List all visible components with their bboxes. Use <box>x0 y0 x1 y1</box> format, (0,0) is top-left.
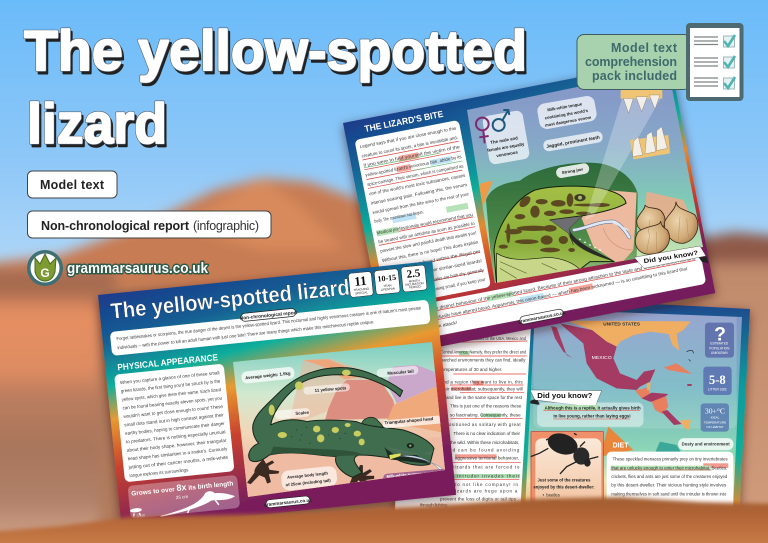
text panel: did you know fact: Some inside into the distinct behaviour of the yellow-spotted lizard. Because of their strong attraction to the taste and smell of onions, humans <box>394 255 696 319</box>
text panel: legend and medical advice: be treated with an antidote as soon as possible to <box>378 221 475 244</box>
map: Mexico <box>551 323 655 390</box>
stat: 2.5: MONTH <box>409 278 420 284</box>
lizard illustration panel <box>233 342 445 497</box>
stat: 11 years: TEACHING <box>353 287 370 292</box>
beetle panel: Just some of the creatures <box>538 478 591 483</box>
text column: habitat: find a region they want to live in, this <box>441 379 523 384</box>
stat: population unknown: ? <box>714 325 726 346</box>
text panel: legend and medical advice: yellow-spotted lizard's venomous bite, abide by its <box>365 154 463 178</box>
stat: population unknown <box>705 323 734 358</box>
stat: ideal temperature: OF HABITAT <box>706 425 724 429</box>
heading: the lizard's bite: THE LIZARD'S BITE <box>364 109 444 134</box>
stat: 10-15: YEAR <box>383 283 393 288</box>
growth panel: Grows to over 8x its birth length <box>131 477 234 498</box>
text panel: physical appearance: When you capture a glance of one of these small <box>120 370 220 385</box>
map: United States <box>566 321 691 351</box>
symbols: female and male card <box>476 110 530 165</box>
main title: lizard <box>27 92 167 155</box>
callout: comprehension pack: Model text <box>611 41 678 55</box>
text panel: diet: These speckled menaces primarily prey on tiny invertebrates <box>613 457 728 462</box>
pill: dusty environment <box>678 438 733 450</box>
foreground blurred dune <box>0 497 768 543</box>
stat: 11 years <box>348 271 373 297</box>
teeth spotlight <box>585 97 662 220</box>
text column: habitat: Central America. Namely, they prefer the direct and <box>441 349 526 354</box>
stat: 2.5: PERIOD <box>409 284 422 290</box>
model text sheet: front page <box>98 261 456 529</box>
stat: ideal temperature: 30+°C <box>705 406 725 415</box>
stat: population unknown: POPULATION <box>709 346 730 350</box>
text column: habitat: lizard can be found avoiding <box>440 448 520 453</box>
icon: black beetle <box>531 430 598 474</box>
stat: ideal temperature: TEMPERATURE <box>704 420 726 424</box>
text panel: physical appearance: green lizards, the first thing you'd be struck by is the <box>121 379 221 394</box>
text panel: physical appearance <box>114 364 234 482</box>
text panel: diet <box>607 452 733 508</box>
icon: growth lizard silhouette <box>129 489 236 520</box>
did you know? banner: Did you know? <box>643 250 699 265</box>
stat: 2.5: INCUBATION <box>405 281 424 287</box>
pill: jagged teeth: Jagged, prominent teeth <box>546 135 600 149</box>
heading: physical appearance: PHYSICAL APPEARANCE <box>117 352 218 372</box>
text panel: legend and medical advice <box>354 120 491 307</box>
tag: non-chronological report: (infographic) <box>193 219 259 233</box>
text column: habitat: temperatures of 30 and higher. <box>441 367 502 372</box>
onions <box>635 202 698 254</box>
callout: comprehension pack: pack included <box>592 69 677 83</box>
pill: non-chronological report: Non-chronological report <box>240 310 298 322</box>
stat: 11 years: SPECIAL <box>355 290 368 295</box>
yellow-spotted lizard <box>247 368 434 489</box>
icon: checklist clipboard <box>686 23 744 101</box>
text column: habitat: they do not like company! In <box>440 482 518 487</box>
symbols: female and male card: female are equally <box>487 141 525 153</box>
text column: habitat: lizards are huge upon a <box>453 489 518 494</box>
label: body length: of 25cm (including tail) <box>285 478 332 487</box>
label: body length: Average body length <box>287 470 329 480</box>
text panel: legend and medical advice: body. The countdown has begun. <box>374 209 424 224</box>
text column: habitat: through fighting. <box>420 503 448 508</box>
bite illustration panel <box>467 86 703 283</box>
text panel: physical appearance: yellow spots, which give them their name. Each lizard <box>121 387 222 402</box>
heading: diet: DIET <box>613 442 629 449</box>
label: triangular-shaped head: Triangular-shaped head <box>384 416 434 425</box>
text column: habitat: their microhabitat; subsequently, they will <box>441 386 523 391</box>
text panel: legend and medical advice: intense searing pain. Following this, the venom <box>370 182 468 206</box>
label: scales: Scales <box>295 410 310 416</box>
text panel: physical appearance: earthy bodies, hoping to communicate their danger <box>125 421 225 436</box>
text panel: legend and medical advice: would spread from the bite area to the rest of your <box>372 191 470 215</box>
background mountains and bush <box>467 163 697 287</box>
did you know? banner <box>634 246 708 268</box>
text panel: legend and medical advice: Without this, there is no hope! This does explain <box>381 239 479 263</box>
stat: 11 years: 11 <box>354 273 367 289</box>
text panel: physical appearance: can be found bearing exactly eleven spots, yet you <box>122 395 223 411</box>
stat: population unknown: UNKNOWN <box>711 351 728 355</box>
growth panel: 25 cm <box>176 494 189 500</box>
text panel: diet: by this desert-dweller. Their vicious hunting style involves <box>611 483 727 488</box>
text panel: legend and medical advice: Females are bigger, and males are both shy, generally <box>387 267 485 291</box>
did you know? banner: Did you know? <box>537 391 593 400</box>
lizard head <box>494 186 626 284</box>
text panel: physical appearance: to predators. There is nothing especially unusual <box>126 429 226 444</box>
pill: jagged teeth <box>543 131 603 152</box>
label: muscular tail <box>376 366 419 378</box>
callout: gives birth: Although this is a reptile, it actually gives birth <box>545 405 641 410</box>
pill: milk-white tongue venom: Milk-white tongue <box>547 101 583 112</box>
main title: lizard <box>27 92 167 155</box>
intro text panel <box>110 300 431 356</box>
text column: habitat: and live in the same space for the rest <box>446 395 523 400</box>
symbols: female and male card: The male and <box>490 135 518 145</box>
map illustration panel <box>526 312 742 506</box>
text column: habitat: the wild. Within these microhabitats, <box>450 440 519 445</box>
beetle panel: • beetles <box>543 493 560 498</box>
pink mouth and arm <box>582 189 637 265</box>
stat: 10-15: LIFESPAN <box>381 286 395 292</box>
icon: dinosaur footprint badge <box>27 250 63 286</box>
main title <box>24 19 529 158</box>
stat: ideal temperature <box>701 403 729 432</box>
map: United States: UNITED STATES <box>603 321 640 326</box>
label: milk-white tongue <box>383 469 447 483</box>
growth panel <box>127 475 240 520</box>
pill: dusty environment: Dusty and environment <box>682 441 730 446</box>
text column: habitat <box>395 326 531 515</box>
main title: The yellow-spotted <box>24 19 527 82</box>
symbols: female and male card: venomous <box>496 149 519 158</box>
text panel: legend and medical advice: one of the world's most toxic substances, causes <box>369 173 466 196</box>
text column: habitat: positioned as solitary with great <box>446 422 521 427</box>
label: body length <box>281 466 338 491</box>
label: scales <box>275 408 310 419</box>
text column: habitat: so fascinating. Consequently, these <box>450 413 521 418</box>
label: yellow spots <box>303 383 350 395</box>
stat: ideal temperature: IDEAL <box>711 416 720 420</box>
label: triangular-shaped head <box>382 416 440 428</box>
text panel: legend and medical advice: if you were to find yourself the victim of the <box>363 144 461 168</box>
label: muscular tail: Muscular tail <box>387 369 414 376</box>
text panel: diet: crickets, flies and ants are just some of the creatures enjoyed <box>611 474 728 479</box>
grammarsaurus logo <box>27 250 209 286</box>
intro text panel: Forget rattlesnakes or scorpions, the true danger of the desert is the yellow-spotted lizard. This nocturnal and highly venomous creature is one of nature's most private <box>116 305 422 341</box>
pill: milk-white tongue venom: most dangerous venom <box>545 115 592 128</box>
growth panel: 3 cm <box>136 512 146 518</box>
callout: comprehension pack <box>577 34 691 90</box>
main title: The yellow-spotted <box>24 19 527 82</box>
map: Central America and Caribbean <box>635 350 693 430</box>
tag: model text: Model text <box>40 178 105 192</box>
translucent map card <box>533 312 737 428</box>
icon: dinosaur footprint badge: G <box>40 266 50 280</box>
logo pill: grammarsaurus.co.uk <box>518 310 566 324</box>
text panel: physical appearance: tongue explores its surroundings. <box>129 467 189 478</box>
icons: fangs <box>621 89 670 159</box>
milk-white tongue <box>574 222 629 237</box>
pill: milk-white tongue venom <box>537 95 597 130</box>
callout: gives birth: to live young, rather than laying eggs! <box>553 414 631 419</box>
stat: population unknown: ESTIMATED <box>710 342 729 346</box>
background mountains <box>233 358 447 500</box>
logo pill: grammarsaurus.co.uk <box>264 497 312 507</box>
beetle panel: • crickets <box>543 499 561 504</box>
pill: strong jaw: Strong jaw <box>561 166 584 175</box>
text panel: legend and medical advice: why very few are found within the illegal pet <box>383 249 481 272</box>
text panel: diet: making themselves in soft sand until the intruder is thrown into <box>611 491 727 496</box>
label: milk-white tongue: Milk-white tongue <box>386 471 422 479</box>
beetle panel <box>530 431 604 502</box>
label: average weight <box>241 367 295 384</box>
text column: habitat: parched environments they can find, ideally <box>441 358 526 363</box>
text panel: legend and medical advice: Legend says that if you are close enough to this <box>359 125 457 149</box>
label: average weight: Average weight: 1.5kg <box>245 371 291 380</box>
text panel: physical appearance: wouldn't want to get close enough to count! These <box>123 404 224 419</box>
stat: 10-15: 10-15 <box>377 273 397 284</box>
background mountains <box>600 427 683 457</box>
text panel: legend and medical advice: spice-carriage. Their venom, which is comparised as <box>367 163 464 187</box>
stat: 2.5 <box>401 265 427 292</box>
callout: comprehension pack: comprehension <box>585 55 677 69</box>
pill: strong jaw <box>556 163 590 178</box>
text panel: legend and medical advice: prevent the slow and painful death that awaits you! <box>380 230 477 254</box>
text column: habitat: southwestern states of the USA, Mexico and <box>450 336 526 341</box>
milk-white tongue <box>400 455 444 471</box>
text panel: legend and medical advice: be found, the chances of being small, if you keep your <box>389 277 486 300</box>
intro text panel: individuals – with the power to kill an adult human with just one bite! There are many things which make this mischievous reptile unique. <box>117 319 374 350</box>
did you know? banner <box>530 390 602 405</box>
stat: litter size: LITTER SIZE <box>708 388 727 392</box>
text panel: did you know fact <box>388 250 706 344</box>
text panel: legend and medical advice: trade, compared to other similar-sized lizards! <box>385 258 482 282</box>
text panel: physical appearance: small dots stand out in high contrast against their <box>124 412 224 427</box>
text panel: diet: that are unlucky enough to enter their microhabitat. Beetles, <box>611 465 727 470</box>
model text sheet: the lizard's bite <box>343 59 720 357</box>
model text sheet: map and diet page <box>390 302 756 510</box>
text column: habitat: aggressive territorial behaviour. <box>455 455 519 460</box>
text column: habitat: of an intruder invades their <box>440 473 520 478</box>
text column: habitat: prevent the loss of digits or tail tips <box>440 497 517 502</box>
beetle panel: enjoyed by this desert-dweller: <box>533 484 594 489</box>
text column: habitat: This is just one of the reasons these <box>450 404 522 409</box>
page title: The yellow-spotted lizard <box>109 275 351 324</box>
text panel: did you know fact: quantity of onions actually have altered blood. Apparently, this onion-based — which has been nicknamed — is so unsettling to this lizard that <box>396 266 688 327</box>
text panel: physical appearance: jutting out of their cancer mouths, a milk-white <box>127 455 229 470</box>
text panel: physical appearance: about their body shape, however, their triangular <box>127 438 227 453</box>
text panel: legend and medical advice: Medical professionals would recommend that you <box>376 212 474 236</box>
main title: lizard <box>29 95 169 158</box>
stat: 2.5: 2.5 <box>406 267 421 281</box>
label: yellow spots: 11 yellow spots <box>314 385 347 393</box>
map: Mexico: MEXICO <box>592 355 612 360</box>
text panel: physical appearance: head shape has similarities to a snake's. Curiously <box>127 446 228 461</box>
pill: milk-white tongue venom: containing the world's <box>544 108 589 120</box>
grammarsaurus logo: grammarsaurus.co.uk <box>67 260 209 277</box>
stat: litter size: 5-8 <box>709 373 726 387</box>
tag: non-chronological report <box>28 211 271 238</box>
text panel: did you know fact: and run, rather than attack! <box>398 320 458 336</box>
text column: habitat: with lizards that are forced to <box>440 465 520 470</box>
stat: 10-15 <box>374 269 400 295</box>
text panel: legend and medical advice: creature to count its spots, a bite is inevitable and, <box>361 135 458 159</box>
main title: The yellow-spotted <box>26 22 529 85</box>
tag: non-chronological report: Non-chronological report <box>41 219 190 233</box>
stat: litter size <box>703 367 732 395</box>
callout: gives birth <box>537 403 643 427</box>
tag: model text <box>28 171 117 198</box>
text column: habitat: There is no clear indication of their <box>453 431 520 436</box>
